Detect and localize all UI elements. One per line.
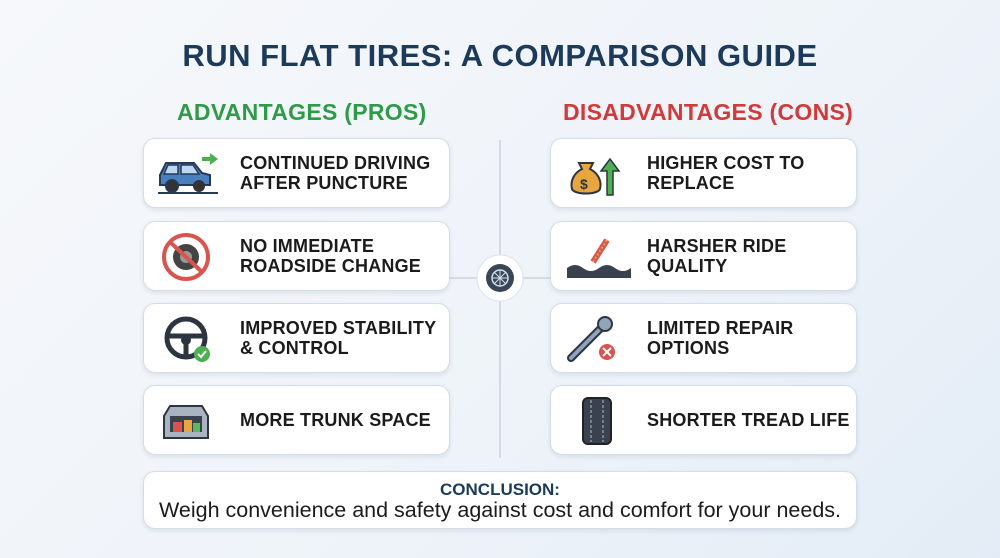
text: MORE TRUNK SPACE	[240, 410, 431, 430]
text	[647, 236, 786, 276]
text	[240, 318, 436, 358]
text: ROADSIDE CHANGE	[240, 256, 421, 276]
text: SHORTER TREAD LIFE	[647, 410, 850, 430]
card: no roadside change	[143, 221, 450, 291]
icon: shock absorber bumpy road	[567, 238, 631, 278]
icon: car with arrow	[158, 153, 218, 194]
icon: no tire change	[162, 233, 210, 281]
conclusion text: Weigh convenience and safety against cost and comfort for your needs.	[159, 498, 841, 522]
icon: money bag up arrow: $	[580, 176, 588, 192]
text: NO IMMEDIATE	[240, 236, 374, 256]
icon: money bag up arrow	[570, 158, 620, 196]
text: REPLACE	[647, 173, 734, 193]
icon: wrench x	[567, 316, 615, 362]
card: continued driving	[143, 138, 450, 208]
heading: advantages: ADVANTAGES (PROS)	[177, 99, 427, 125]
card: stability	[143, 303, 450, 373]
text: HIGHER COST TO	[647, 153, 804, 173]
text: QUALITY	[647, 256, 727, 276]
text	[647, 318, 793, 358]
card: trunk space	[143, 385, 450, 455]
icon: center tire	[476, 254, 524, 302]
text: CONTINUED DRIVING	[240, 153, 430, 173]
card: limited repair	[550, 303, 857, 373]
title: RUN FLAT TIRES: A COMPARISON GUIDE	[182, 38, 818, 73]
text	[240, 236, 421, 276]
text: & CONTROL	[240, 338, 349, 358]
text	[240, 153, 430, 193]
icon: open trunk	[163, 405, 209, 439]
card: harsher ride	[550, 221, 857, 291]
heading: disadvantages: DISADVANTAGES (CONS)	[563, 99, 853, 125]
text: HARSHER RIDE	[647, 236, 786, 256]
conclusion heading: CONCLUSION:	[440, 480, 560, 499]
icon: worn tread	[582, 397, 612, 445]
text	[647, 153, 804, 193]
card: shorter tread	[550, 385, 857, 455]
text: AFTER PUNCTURE	[240, 173, 408, 193]
card: higher cost	[550, 138, 857, 208]
conclusion box	[143, 471, 857, 529]
text: IMPROVED STABILITY	[240, 318, 436, 338]
text: OPTIONS	[647, 338, 729, 358]
icon: steering wheel check	[164, 316, 210, 362]
text: LIMITED REPAIR	[647, 318, 793, 338]
